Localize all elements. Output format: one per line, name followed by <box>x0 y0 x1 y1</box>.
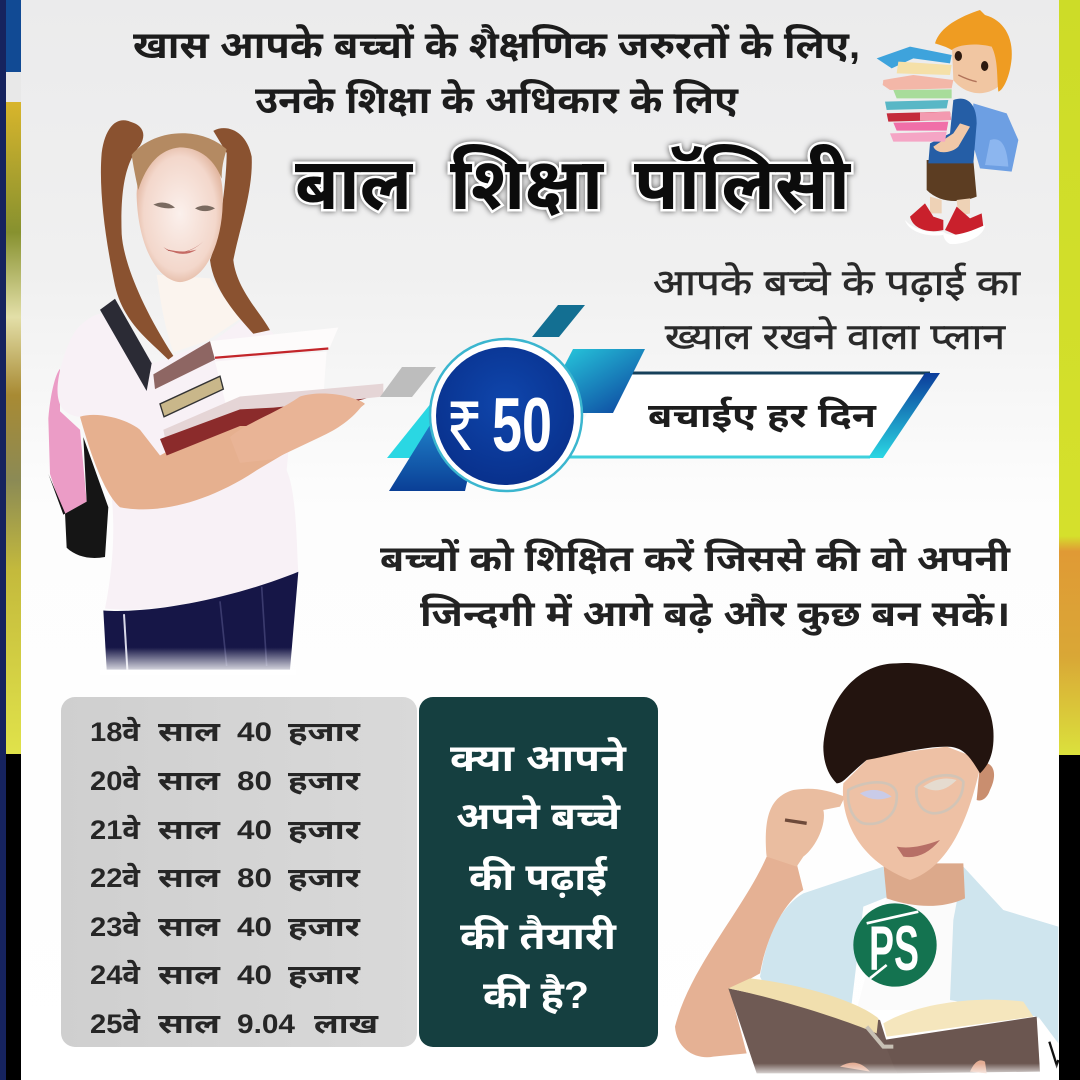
row: 20th year: 80 <box>237 766 272 796</box>
row: 21st year: 21वे <box>90 814 141 845</box>
label ribbon <box>560 373 940 458</box>
row: 23rd year: साल <box>158 912 221 942</box>
panel: question: की पढ़ाई <box>469 855 608 899</box>
row: 24th year: 40 <box>237 960 272 990</box>
row: 24th year: 24वे <box>90 959 141 990</box>
row: 23rd year <box>90 911 361 942</box>
open book <box>728 978 1058 1073</box>
row: 23rd year: 40 <box>237 912 272 942</box>
badge: save 50 rupees every day <box>380 305 940 491</box>
heading: top two lines <box>133 23 860 122</box>
row: 18th year: साल <box>158 717 221 747</box>
text block: educate your children: जिन्दगी में आगे बढ़े और कुछ बन सकें। <box>420 592 1010 636</box>
panel: question: अपने बच्चे <box>456 794 621 838</box>
row: 25th year <box>90 1008 380 1039</box>
row: 23rd year: 23वे <box>90 911 141 942</box>
row: 18th year: हजार <box>288 717 361 747</box>
row: 21st year: 40 <box>237 815 272 845</box>
row: 25th year: लाख <box>314 1009 380 1039</box>
panel: question: क्या आपने <box>450 736 627 780</box>
title: policy name: शिक्षा <box>450 144 605 225</box>
text block: plan description <box>653 262 1021 357</box>
text block: educate your children: बच्चों को शिक्षित करें जिससे की वो अपनी <box>380 537 1012 579</box>
photo: boy reading with glasses <box>675 663 1060 1077</box>
text block: plan description: आपके बच्चे के पढ़ाई का <box>653 262 1021 303</box>
illustration: cartoon boy carrying books <box>877 10 1018 244</box>
label ribbon: बचाईए हर दिन <box>648 396 877 435</box>
text block: educate your children <box>380 537 1012 636</box>
row: 22nd year: 22वे <box>90 862 141 893</box>
logo: PS badge: PS <box>869 914 919 984</box>
row: 18th year: 40 <box>237 717 272 747</box>
row: 20th year: 20वे <box>90 765 141 796</box>
panel: question: की तैयारी <box>460 914 617 958</box>
row: 25th year: 9.04 <box>237 1009 295 1039</box>
photo: girl holding books <box>48 120 383 675</box>
row: 23rd year: हजार <box>288 912 361 942</box>
row: 25th year: 25वे <box>90 1008 141 1039</box>
row: 21st year: हजार <box>288 815 361 845</box>
heading: top two lines: खास आपके बच्चों के शैक्षणिक जरुरतों के लिए, <box>133 23 860 67</box>
row: 21st year <box>90 814 361 845</box>
panel: payout table <box>61 697 417 1047</box>
panel: question <box>419 697 658 1047</box>
row: 22nd year <box>90 862 361 893</box>
row: 20th year <box>90 765 361 796</box>
row: 24th year: साल <box>158 960 221 990</box>
title: policy name: बाल <box>295 145 414 225</box>
row: 18th year <box>90 716 361 747</box>
rupee circle <box>430 339 582 491</box>
row: 18th year: 18वे <box>90 716 141 747</box>
row: 21st year: साल <box>158 815 221 845</box>
rupee circle: 50 <box>492 383 552 468</box>
row: 22nd year: साल <box>158 863 221 893</box>
title: policy name: पॉलिसी <box>634 144 852 225</box>
row: 20th year: हजार <box>288 766 361 796</box>
panel: question: की है? <box>483 973 589 1017</box>
row: 24th year <box>90 959 361 990</box>
logo: PS badge <box>853 903 937 987</box>
row: 22nd year: हजार <box>288 863 361 893</box>
black lower-right background <box>1059 755 1080 1080</box>
rupee circle: ₹ <box>446 379 482 467</box>
row: 20th year: साल <box>158 766 221 796</box>
title: policy name <box>295 144 852 225</box>
row: 22nd year: 80 <box>237 863 272 893</box>
text block: plan description: ख्याल रखने वाला प्लान <box>665 316 1006 357</box>
heading: top two lines: उनके शिक्षा के अधिकार के लिए <box>255 78 739 122</box>
row: 25th year: साल <box>158 1009 221 1039</box>
row: 24th year: हजार <box>288 960 361 990</box>
